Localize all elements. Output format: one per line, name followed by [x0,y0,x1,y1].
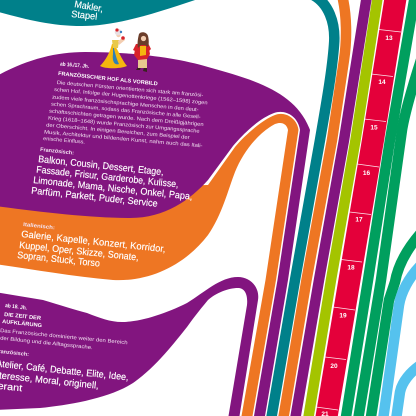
teal word list [71,0,104,23]
French court text block: Krieg (1618–1648) wurde Französisch zur Umgangssprache [48,116,200,135]
panel: purple Enlightenment section [0,277,258,416]
French word list: Parfüm, Parkett, Puder, Service [31,186,158,210]
Italian word list: Kuppel, Oper, Skizze, Sonate, [19,240,139,264]
Enlightenment text block: DIE ZEIT DER [4,312,41,322]
Italian word list: Italienisch: [23,222,55,231]
French word list [31,147,193,210]
icon: man in red coat [133,32,151,72]
timeline: red numbered ruler: 14 [378,79,386,86]
stripes [271,0,416,416]
French court text block: schen Sprachraum, sodass das Französische in alle Gesell- [51,102,201,121]
French word list: Limonade, Mama, Nische, Onkel, Papa, [33,175,193,203]
French court text block: Musik, Architektur und bildenden Kunst, nahm auch das Itali- [44,130,203,149]
Enlightenment text block: der Bildung und die Alltagssprache. [0,336,93,351]
Enlightenment word list [0,349,129,394]
French court text block: enische Einfluss. [43,136,85,146]
Enlightenment text block [0,303,128,351]
blue stripe two [396,364,416,416]
green stripe two [358,60,416,416]
timeline: red numbered ruler: 20 [330,363,338,370]
Italian word list [17,222,166,270]
French word list: Balkon, Cousin, Dessert, Etage, [38,154,164,178]
timeline: red numbered ruler [316,0,401,416]
icon: lady in yellow dress [100,28,127,68]
panel: teal top band [0,0,210,26]
Enlightenment text block: Das Französische dominierte weiter den Bereich [0,328,128,346]
French court text block: der Oberschicht. In einigen Bereichen, zum Beispiel der [46,123,190,141]
Enlightenment text block: AUFKLÄRUNG [2,318,42,329]
French court text block: Die deutschen Fürsten orientierten sich stark am französi- [57,80,204,99]
teal word list: Stapel [71,9,98,23]
timeline: red numbered ruler: 19 [339,312,347,320]
French word list: Französisch: [40,147,74,157]
French court text block: schaftsschichten getragen wurde. Nach dem Dreißigjährigen [49,109,204,128]
French court text block: zudem viele französischsprachige Menschen in den deut- [52,95,199,113]
timeline: red numbered ruler: 18 [347,264,355,272]
French court text block [43,62,208,149]
timeline: red numbered ruler: 17 [355,216,363,224]
orange stripe [283,0,346,416]
Italian word list: Sopran, Stuck, Torso [17,250,100,270]
French court text block: ab 16./17. Jh. [60,62,90,70]
purple stripe [295,0,367,416]
timeline: red numbered ruler: 15 [370,124,378,132]
blue stripe [383,264,416,416]
panel: purple French court section [0,52,310,416]
French court text block: schen Hof. Infolge der Hugenottenkriege (1562–1598) zogen [54,87,208,106]
Enlightenment text block: ab 18. Jh. [5,303,28,312]
green stripe three [370,234,416,416]
teal stripe [271,0,334,416]
timeline: red numbered ruler: 16 [363,170,370,177]
panel: orange Italian band [0,114,298,416]
lime stripe [308,0,378,416]
French court text block: FRANZÖSISCHER HOF ALS VORBILD [58,70,158,87]
green stripe [346,0,415,416]
timeline: red numbered ruler: 13 [385,35,393,42]
Italian word list: Galerie, Kapelle, Konzert, Korridor, [21,229,166,255]
French word list: Fassade, Frisur, Garderobe, Kulisse, [36,165,179,190]
